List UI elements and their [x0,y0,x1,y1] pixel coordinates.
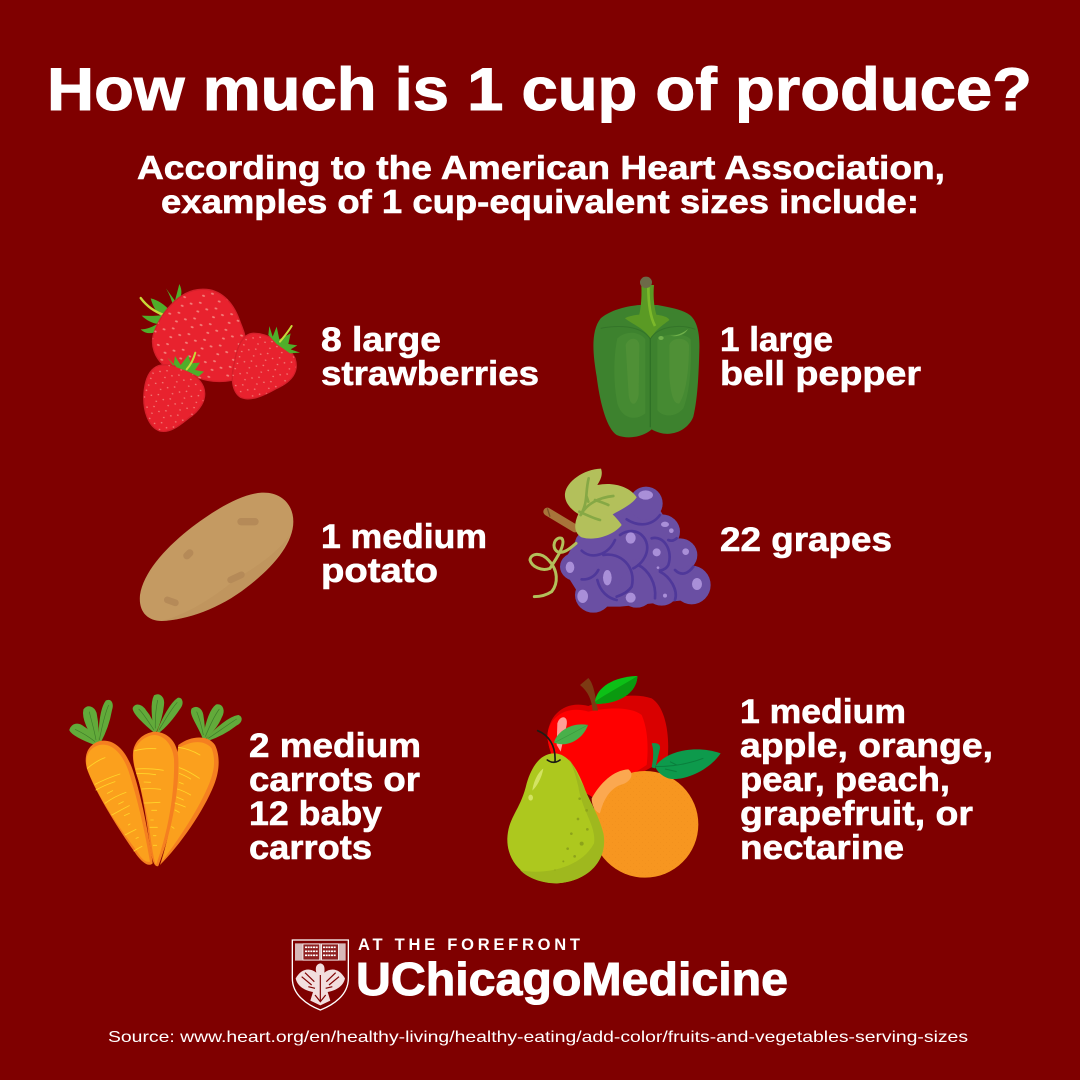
label: apple, orange, pear, peach, grapefruit, nectarine: 1 medium [740,693,906,731]
label: strawberries [321,321,539,393]
label: carrots: 12 baby [249,795,382,833]
icon: apple, orange and pear [507,676,721,883]
logo: UChicago Medicine [292,936,788,1010]
title: How much is 1 cup of produce? [47,56,1032,123]
subtitle: According to the American Heart Association, [137,149,945,186]
label: potato [321,518,487,590]
label: bell pepper [720,321,921,393]
label: bell pepper: bell pepper [720,355,921,393]
icon: grapes [530,469,711,613]
label: carrots: carrots or [249,761,420,799]
icon: strawberries [141,284,300,431]
label: potato: 1 medium [321,518,487,556]
logo wordmark: UChicagoMedicine [356,953,788,1005]
logo tagline: AT THE FOREFRONT [358,936,580,954]
label: apple, orange, pear, peach, grapefruit, nectarine: grapefruit, or [740,795,973,833]
label: bell pepper: 1 large [720,321,833,359]
label: strawberries: strawberries [321,355,539,393]
icon: carrots [71,696,240,866]
label: apple, orange, pear, peach, grapefruit, nectarine: nectarine [740,829,904,867]
label: carrots: 2 medium [249,727,421,765]
icon: potato [140,493,293,621]
subtitle: examples of 1 cup-equivalent sizes include: [161,183,919,220]
label: apple, orange, pear, peach, grapefruit, nectarine [740,693,993,867]
label: carrots [249,727,421,867]
label: grapes: 22 grapes [720,521,892,559]
label: carrots: carrots [249,829,372,867]
label: apple, orange, pear, peach, grapefruit, nectarine: apple, orange, [740,727,993,765]
icon: crest [292,940,348,1010]
subtitle [137,149,945,220]
label: apple, orange, pear, peach, grapefruit, nectarine: pear, peach, [740,761,950,799]
label: strawberries: 8 large [321,321,441,359]
icon: bell pepper [593,277,699,437]
source: Source: www.heart.org/en/healthy-living/healthy-eating/add-color/fruits-and-vegetables-serving-sizes [108,1029,968,1046]
label: potato: potato [321,552,438,590]
